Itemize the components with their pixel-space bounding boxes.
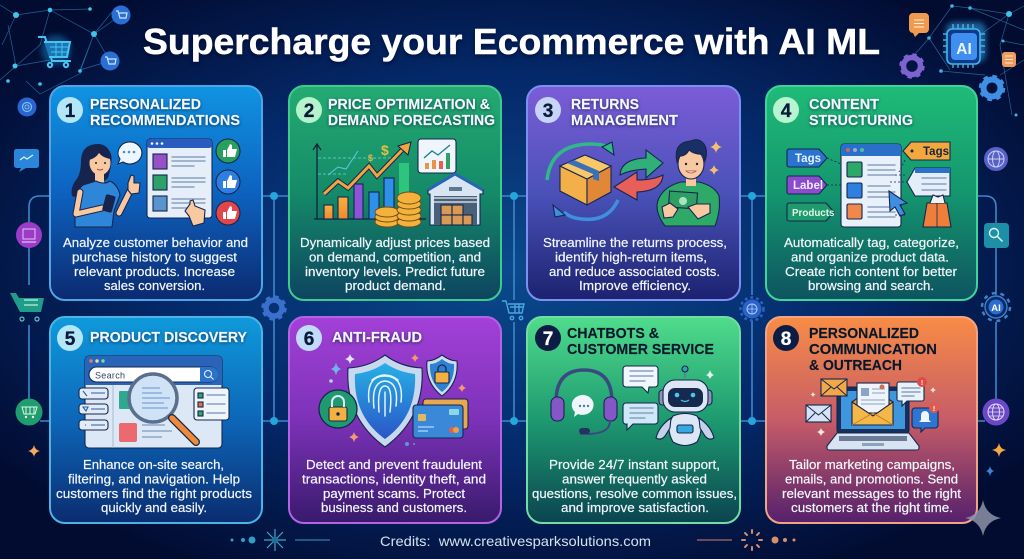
heading: & OUTREACH: [809, 357, 902, 374]
number badge 2: [296, 97, 322, 123]
body text: on demand, competition, and: [309, 250, 481, 264]
number badge 4: [773, 97, 799, 123]
icon: orange chat bubble: [909, 13, 929, 37]
body text: customers find the right products: [56, 486, 252, 501]
number badge 5: 5: [65, 329, 76, 350]
body text: browsing and search.: [808, 278, 934, 293]
body text: [63, 235, 248, 293]
body text: identify high-return items,: [555, 250, 707, 264]
body text: Automatically tag, categorize,: [784, 235, 959, 250]
connector lines: [29, 192, 996, 425]
illustration: search page and magnifier: Search: [95, 370, 125, 380]
illustration: tags and product data: Tags: [923, 146, 949, 158]
icon: search node: [984, 223, 1009, 248]
body text: business and customers.: [321, 500, 467, 515]
body text: [302, 457, 486, 515]
panel: returns management: [527, 86, 740, 300]
body text: [532, 457, 737, 515]
panel: anti-fraud: [289, 317, 501, 523]
illustration: tags and product data: Products: [792, 208, 835, 219]
icon: purple globe node: [982, 398, 1010, 426]
heading: MANAGEMENT: [571, 112, 678, 129]
illustration: search page and magnifier: [79, 356, 229, 448]
icon: green cart: [10, 293, 44, 321]
panel: personalized communication: [766, 317, 977, 523]
body text: transactions, identity theft, and: [302, 472, 486, 486]
panel: content structuring: [766, 86, 977, 300]
panel: personalized recommendations: [50, 86, 262, 300]
body text: inventory levels. Predict future: [305, 264, 485, 279]
illustration: tags and product data: [787, 142, 951, 227]
icon: AI gear node: AI: [991, 303, 1001, 314]
heading: COMMUNICATION: [809, 341, 937, 358]
number badge 4: 4: [781, 101, 792, 122]
heading: PRODUCT DISCOVERY: [90, 329, 247, 346]
heading: PERSONALIZED: [809, 325, 919, 342]
icon: small cart badge top: [112, 6, 130, 24]
body text: filtering, and navigation. Help: [68, 472, 240, 486]
heading: RECOMMENDATIONS: [90, 112, 240, 129]
icon: small orange star right: [992, 443, 1006, 457]
illustration: woman with product list: [72, 139, 240, 227]
icon: blue gear: [980, 76, 1004, 100]
heading: RETURNS: [571, 96, 639, 113]
body text: Streamline the returns process,: [543, 235, 727, 250]
illustration: laptop with envelopes: !: [921, 380, 923, 387]
body text: and organize product data.: [791, 250, 949, 264]
number badge 1: [57, 97, 83, 123]
icon: globe badge: [984, 147, 1008, 171]
heading: [809, 96, 913, 129]
number badge 7: [535, 325, 561, 351]
body text: [784, 235, 959, 293]
body text: and improve satisfaction.: [561, 500, 709, 515]
icon: small orange bubble: [1002, 52, 1016, 67]
body text: relevant products. Increase: [74, 264, 235, 279]
heading: [809, 325, 937, 374]
panel: product discovery: [50, 317, 262, 523]
network decoration: top right: [910, 4, 1024, 117]
body text: sales conversion.: [104, 278, 205, 293]
body text: answer frequently asked: [562, 472, 707, 486]
heading: CHATBOTS &: [567, 325, 659, 342]
illustration: return box and customer: [547, 140, 722, 226]
heading: [328, 96, 495, 129]
number badge 3: 3: [543, 101, 553, 122]
heading: [571, 96, 678, 129]
illustration: tags and product data: Label: [793, 180, 823, 192]
icon: network gear node: [740, 298, 764, 320]
icon: large gray sparkle: [965, 500, 1001, 536]
body text: relevant messages to the right: [782, 486, 961, 501]
body text: [543, 235, 727, 293]
body text: questions, resolve common issues,: [532, 486, 737, 501]
illustration: pricing chart, coins and warehouse: [313, 139, 483, 227]
panel: chatbots: [527, 317, 740, 523]
illustration: laptop with envelopes: [806, 377, 939, 450]
number badge 3: [535, 97, 561, 123]
credits: Credits: www.creativesparksolutions.com: [380, 533, 651, 549]
footer ornament right: [697, 530, 796, 550]
icon: small orange star left: [28, 445, 40, 457]
icon: center cart: [502, 301, 524, 320]
illustration: headset, chat bubbles and robot: [551, 366, 714, 446]
heading: STRUCTURING: [809, 112, 913, 129]
body text: Dynamically adjust prices based: [300, 235, 490, 250]
icon: small cart badge bottom: [100, 52, 120, 70]
icon: purple storefront node: [16, 222, 42, 248]
number badge 2: 2: [304, 101, 314, 122]
icon: AI chip: [943, 22, 986, 68]
body text: Enhance on-site search,: [83, 457, 224, 472]
body text: [56, 457, 252, 515]
body text: Analyze customer behavior and: [63, 235, 248, 250]
number badge 8: 8: [781, 329, 791, 350]
number badge 1: 1: [65, 101, 76, 122]
title: Supercharge your Ecommerce with AI ML: [143, 21, 880, 62]
body text: [782, 457, 961, 515]
icon: blue gear node: [263, 297, 285, 319]
body text: purchase history to suggest: [72, 250, 237, 264]
heading: [90, 96, 240, 129]
panel: price optimization: [289, 86, 501, 300]
illustration: laptop with envelopes: !: [933, 406, 935, 413]
number badge 6: [296, 325, 322, 351]
heading: [567, 325, 714, 358]
network decoration: top left: [0, 5, 121, 94]
heading: PRICE OPTIMIZATION &: [328, 96, 490, 113]
heading: DEMAND FORECASTING: [328, 112, 495, 129]
icon: green cart node: [16, 398, 42, 426]
number badge 8: [773, 325, 799, 351]
footer ornament left: [230, 529, 330, 551]
icon: small blue star right: [986, 466, 994, 476]
illustration: tags and product data: Tags: [795, 153, 821, 165]
illustration: pricing chart, coins and warehouse: $: [368, 153, 373, 163]
body text: emails, and promotions. Send: [785, 472, 958, 486]
body text: Create rich content for better: [785, 264, 958, 279]
heading: CUSTOMER SERVICE: [567, 341, 714, 358]
body text: Improve efficiency.: [579, 278, 691, 293]
body text: Provide 24/7 instant support,: [549, 457, 720, 472]
body text: product demand.: [345, 278, 446, 293]
icon: target circle: [18, 98, 36, 116]
heading: CONTENT: [809, 96, 879, 113]
body text: customers at the right time.: [791, 500, 953, 515]
number badge 5: [57, 325, 83, 351]
number badge 6: 6: [304, 329, 314, 350]
icon: AI gear node: [982, 293, 1010, 321]
body text: Tailor marketing campaigns,: [789, 457, 955, 472]
number badge 7: 7: [543, 329, 553, 350]
icon: large shopping cart: [38, 35, 71, 67]
heading: PERSONALIZED: [90, 96, 201, 113]
body text: [300, 235, 490, 293]
body text: quickly and easily.: [101, 500, 207, 515]
icon: chart bubble: [14, 149, 39, 172]
body text: Detect and prevent fraudulent: [306, 457, 482, 472]
icon: purple gear: [901, 55, 923, 77]
body text: and reduce associated costs.: [549, 264, 720, 279]
illustration: fingerprint shield, lock and cards: [319, 354, 468, 447]
body text: payment scams. Protect: [323, 486, 465, 501]
illustration: pricing chart, coins and warehouse: $: [381, 142, 389, 158]
heading: ANTI-FRAUD: [332, 329, 422, 346]
icon: AI chip: AI: [956, 41, 972, 58]
